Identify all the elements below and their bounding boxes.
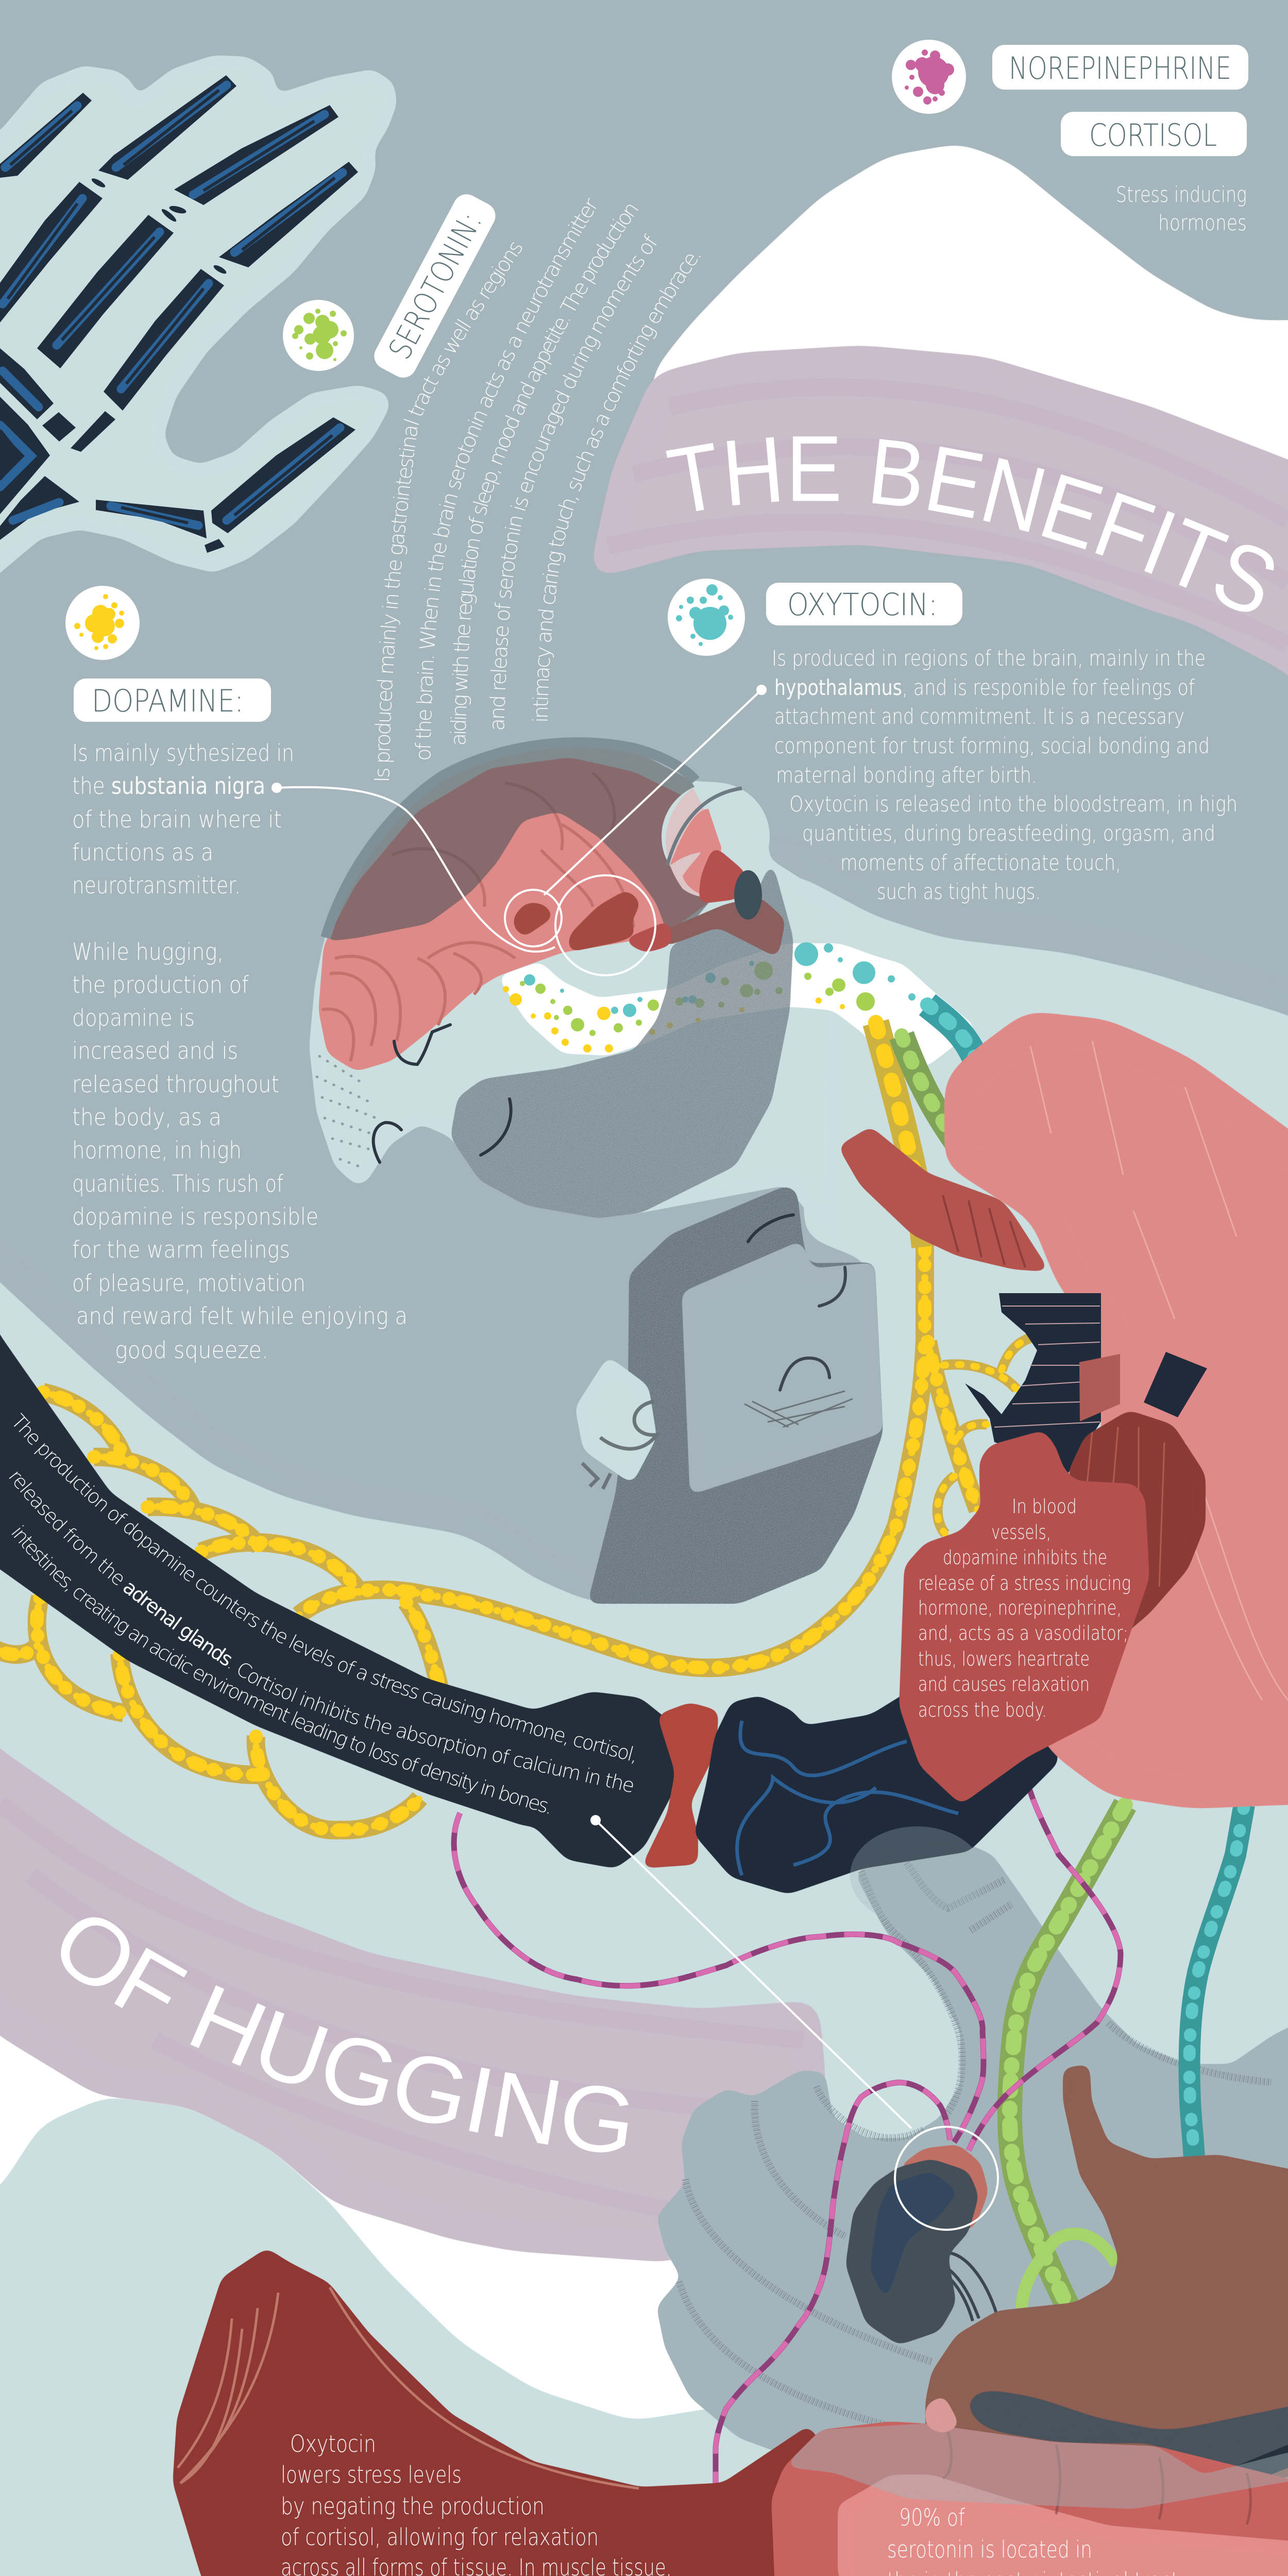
illustration: upper muscle bbox=[838, 1126, 1050, 1272]
text: dopamine description: the substania nigra bbox=[72, 772, 265, 800]
text: oxytocin description bbox=[772, 646, 1238, 904]
brain tissue bbox=[318, 757, 721, 1072]
text: dopamine description: for the warm feelings bbox=[72, 1236, 290, 1263]
text: dopamine description: dopamine is responsible bbox=[72, 1203, 318, 1230]
callout lines: dopamine and oxytocin pointers bbox=[273, 686, 998, 2230]
text: heart description: dopamine inhibits the bbox=[943, 1546, 1107, 1569]
eye on hair bbox=[748, 1215, 793, 1242]
text: oxytocin description: attachment and commitment. It is a necessary bbox=[774, 704, 1184, 729]
illustration: kidney bbox=[845, 2144, 996, 2345]
vessels: yellow dopamine network bbox=[0, 1005, 1031, 1830]
dotted hormone band bbox=[497, 942, 977, 1066]
text: heart description: thus, lowers heartrate bbox=[918, 1648, 1090, 1670]
eye socket bbox=[662, 783, 770, 899]
text: serotonin description, curved: Is produced mainly in the gastrointestinal tract as well as regions bbox=[374, 242, 522, 780]
text: oxytocin muscle description: Oxytocin bbox=[290, 2430, 376, 2458]
facial stipple bbox=[317, 1056, 376, 1167]
eye lines bbox=[374, 1025, 511, 1162]
text: dopamine description: of the brain where it bbox=[72, 806, 282, 833]
text: dopamine description: increased and is bbox=[72, 1037, 238, 1064]
background: white area under lower band bbox=[0, 1932, 773, 2421]
text: serotonin description, curved: of the brain. When in the brain serotonin acts as a neurotransmitter bbox=[415, 198, 597, 759]
text: adrenal band description, curved: released from the adrenal glands. Cortisol inhibits the absorption of calcium in the bbox=[9, 1471, 633, 1792]
title: the benefits: THE BENEFITS bbox=[666, 436, 1274, 612]
label: oxytocin: OXYTOCIN: bbox=[787, 587, 938, 623]
hair, lower head bbox=[587, 1185, 883, 1604]
brainstem bbox=[662, 896, 786, 958]
panel: dark red muscle bbox=[173, 2248, 924, 2576]
panel: intestine bbox=[771, 2395, 1288, 2576]
text: serotonin intestine description bbox=[887, 2504, 1260, 2576]
text: oxytocin description: maternal bonding after birth. bbox=[776, 762, 1037, 788]
title: of hugging: OF HUGGING bbox=[61, 1918, 629, 2153]
text: oxytocin description: component for trust forming, social bonding and bbox=[774, 733, 1210, 758]
text: serotonin description, curved: and release of serotonin is encouraged during moments of bbox=[489, 233, 656, 730]
text: heart description: and, acts as a vasodilator; bbox=[918, 1622, 1128, 1645]
illustration: lung bbox=[944, 1011, 1288, 1809]
vessel: magenta norepinephrine bbox=[454, 1762, 1121, 2488]
icon: dopamine blob bbox=[65, 586, 140, 660]
ear bbox=[575, 1356, 657, 1484]
text: dopamine description: released throughout bbox=[72, 1071, 279, 1098]
text: serotonin description, curved: intimacy and caring touch, such as a comforting embrace. bbox=[532, 255, 701, 720]
illustration: lower face bbox=[575, 1185, 883, 1604]
label: dopamine: DOPAMINE: bbox=[92, 683, 244, 719]
text: heart description: vessels, bbox=[991, 1521, 1051, 1544]
text: heart description bbox=[918, 1495, 1131, 1721]
text: oxytocin muscle description bbox=[281, 2430, 721, 2576]
head silhouette bbox=[309, 740, 845, 1247]
text: oxytocin description: hypothalamus, and is responible for feelings of bbox=[774, 675, 1195, 700]
text: dopamine description: hormone, in high bbox=[72, 1137, 242, 1164]
small pink lobe bbox=[925, 2395, 960, 2434]
icon: norepinephrine blob bbox=[892, 40, 966, 114]
illustration: grey abdominal folds bbox=[656, 1826, 1288, 2504]
text: oxytocin description: such as tight hugs. bbox=[877, 879, 1041, 904]
illustration: dark bone with blue lines bbox=[694, 1649, 1059, 1894]
text: oxytocin muscle description: of cortisol, allowing for relaxation bbox=[281, 2523, 599, 2551]
text: oxytocin description: moments of affectionate touch, bbox=[840, 850, 1121, 875]
skull rim bbox=[326, 742, 696, 938]
text: dopamine description: good squeeze. bbox=[115, 1336, 268, 1364]
icon: serotonin blob bbox=[283, 300, 354, 371]
label: cortisol: CORTISOL bbox=[1089, 117, 1217, 154]
red bulb bbox=[698, 845, 747, 904]
label: norepinephrine bbox=[992, 45, 1248, 90]
pituitary ring bbox=[734, 870, 762, 920]
text: heart description: hormone, norepinephrine, bbox=[918, 1597, 1122, 1619]
text: dopamine description: the production of bbox=[72, 971, 249, 998]
illustration: upper head bbox=[309, 740, 977, 1247]
text: stress inducing hormones bbox=[1116, 182, 1247, 235]
text: dopamine description: While hugging, bbox=[72, 938, 224, 965]
text: heart description: and causes relaxation bbox=[918, 1673, 1090, 1696]
text: dopamine description bbox=[72, 739, 408, 1364]
illustration: heart bbox=[899, 1293, 1207, 1805]
text: dopamine description: quanities. This rush of bbox=[72, 1170, 283, 1197]
substantia nigra blob bbox=[513, 902, 555, 938]
illustration: dark adrenal band bbox=[0, 1236, 677, 1869]
background: grey upper region bbox=[0, 0, 1288, 1604]
label: serotonin: SEROTONIN: bbox=[382, 206, 489, 365]
grey lobe overlapping bone bbox=[850, 1826, 984, 1924]
text: dopamine description: neurotransmitter. bbox=[72, 872, 241, 899]
hypothalamus blob bbox=[568, 889, 641, 953]
text: heart description: release of a stress inducing bbox=[918, 1572, 1131, 1595]
face bbox=[682, 1241, 883, 1495]
text: oxytocin description: quantities, during breastfeeding, orgasm, and bbox=[802, 821, 1215, 846]
illustration: stomach bbox=[925, 2064, 1288, 2488]
label: norepinephrine: NOREPINEPHRINE bbox=[1009, 50, 1231, 87]
text: adrenal band description, curved: intestines, creating an acidic environment leading to loss of density in bones. bbox=[11, 1525, 549, 1814]
vessel: teal oxytocin bbox=[1190, 1805, 1244, 2159]
text: dopamine description: functions as a bbox=[72, 839, 213, 866]
text: serotonin description, curved: aiding with the regulation of sleep, mood and appetite. The production bbox=[450, 205, 638, 744]
grey translucent overlap bbox=[784, 2424, 1288, 2509]
text: dopamine description: Is mainly sythesized in bbox=[72, 739, 294, 767]
text: serotonin intestine description: serotonin is located in bbox=[887, 2536, 1092, 2563]
stem tip bbox=[621, 920, 672, 953]
label: cortisol bbox=[1061, 112, 1247, 156]
text: dopamine description: of pleasure, motivation bbox=[72, 1269, 306, 1297]
text: dopamine description: and reward felt while enjoying a bbox=[76, 1302, 408, 1330]
text: dopamine description: dopamine is bbox=[72, 1004, 195, 1031]
text: stress inducing hormones: hormones bbox=[1158, 210, 1247, 235]
second head eye bbox=[780, 1267, 845, 1390]
text: dopamine description: the body, as a bbox=[72, 1104, 222, 1131]
hair, upper head bbox=[450, 859, 793, 1218]
text: serotonin intestine description: 90% of bbox=[899, 2504, 965, 2531]
icon: hand skeleton bbox=[0, 55, 397, 608]
icon: oxytocin blob bbox=[668, 579, 745, 656]
text: oxytocin muscle description: by negating the production bbox=[281, 2493, 545, 2520]
ear details bbox=[582, 1401, 657, 1489]
text: oxytocin description: Is produced in regions of the brain, mainly in the bbox=[772, 646, 1206, 671]
panel: lilac title band, lower bbox=[0, 1674, 825, 2263]
panel: lilac title band, upper bbox=[587, 345, 1288, 752]
brain contours bbox=[322, 773, 634, 1061]
eyelashes bbox=[744, 1391, 853, 1427]
text: oxytocin muscle description: lowers stress levels bbox=[281, 2461, 462, 2488]
adrenal gland bbox=[899, 2144, 989, 2233]
text: serotonin description, curved bbox=[370, 194, 708, 783]
text: heart description: In blood bbox=[1012, 1495, 1077, 1518]
illustration: red joint bbox=[640, 1702, 719, 1869]
text: stress inducing hormones: Stress inducing bbox=[1116, 182, 1247, 207]
text: adrenal band description, curved: The production of dopamine counters the levels of a stress causing hormone, cortisol, bbox=[14, 1413, 634, 1764]
background: white mountain behind title bbox=[650, 143, 1288, 541]
grey skull cap overlay bbox=[324, 740, 732, 943]
text: heart description: across the body. bbox=[918, 1699, 1047, 1721]
vessel: green serotonin bbox=[1010, 1805, 1125, 2313]
